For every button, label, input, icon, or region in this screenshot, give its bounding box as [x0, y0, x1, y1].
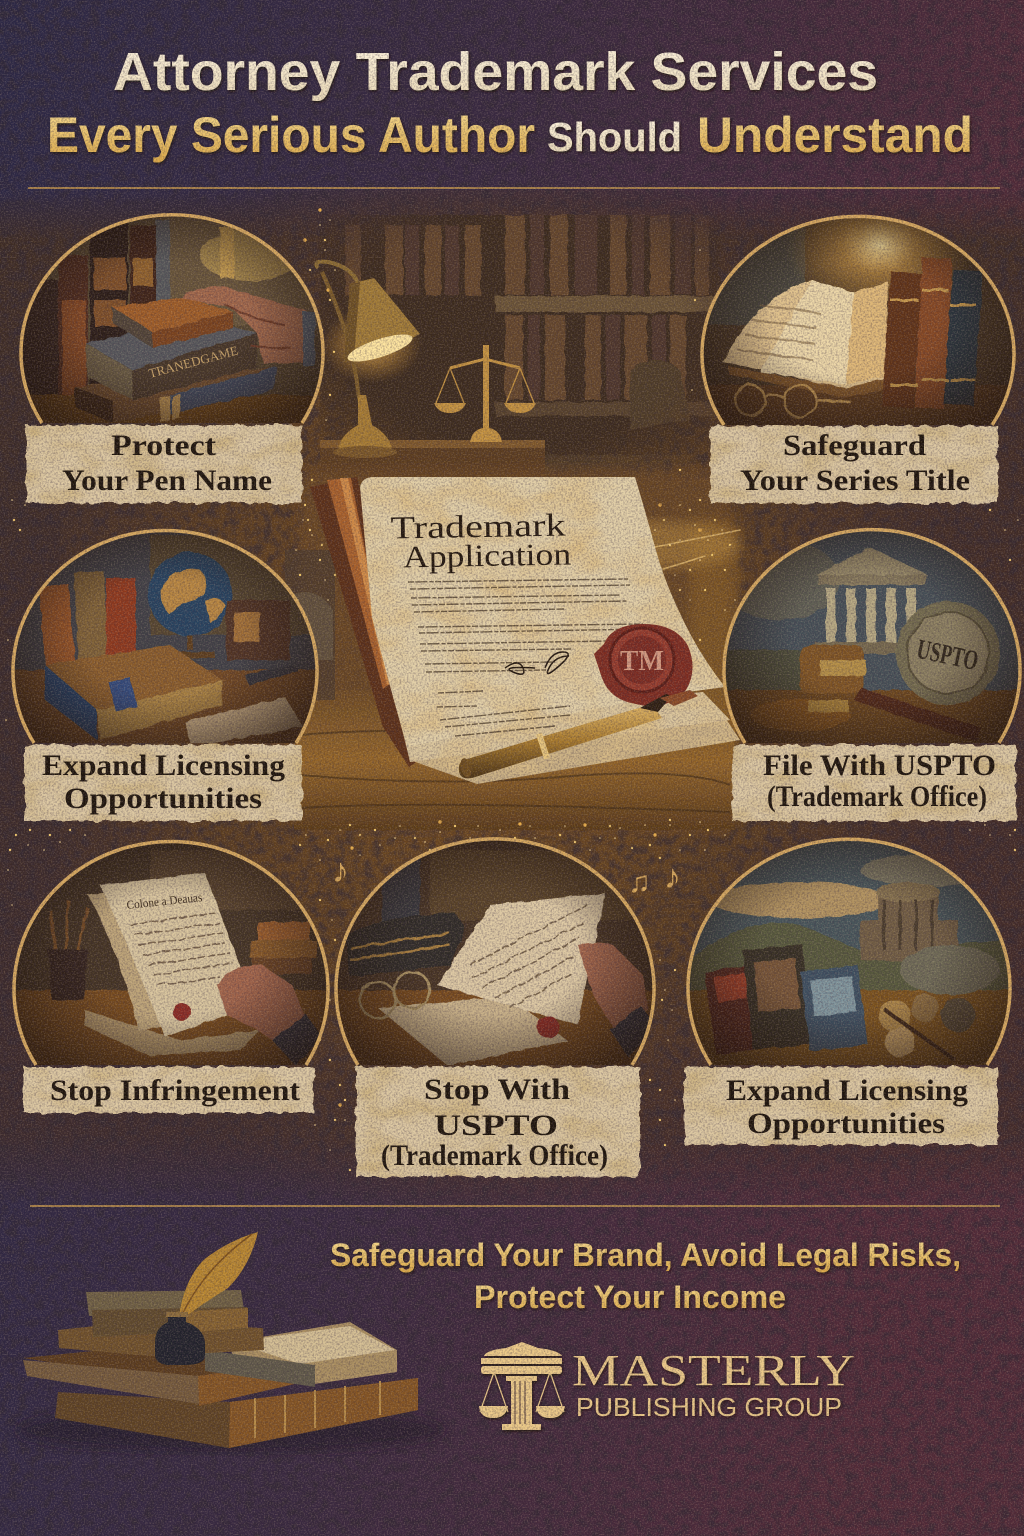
banner label: expand licensing opportunities second: [684, 1067, 998, 1145]
divider bottom: [30, 1205, 1000, 1207]
panel: file with USPTO: [720, 525, 1024, 821]
tagline: Protect Your Income: [474, 1279, 786, 1315]
wax seal TM: [594, 624, 693, 706]
icon: desk lamp: [316, 262, 422, 458]
title: Every Serious Author: [47, 107, 535, 163]
title: Understand: [697, 107, 973, 163]
title: Should: [547, 114, 682, 160]
document body lines: [408, 579, 644, 736]
banner label: file with USPTO: File With USPTO: [763, 749, 996, 782]
banner label: file with USPTO: (Trademark Office): [767, 780, 987, 813]
panel: stop infringement: [10, 838, 335, 1113]
banner label: file with USPTO: [732, 745, 1016, 821]
tagline: [330, 1237, 961, 1315]
banner label: expand licensing opportunities: [24, 745, 302, 821]
wooden desk: [283, 470, 740, 830]
banner label: expand licensing opportunities: Expand Licensing: [42, 749, 285, 782]
lower sheets: [410, 710, 740, 784]
title: Attorney Trademark Services: [113, 42, 878, 102]
panel: file with USPTO: USPTO: [914, 634, 981, 677]
panel: stop with USPTO: [330, 835, 660, 1177]
document stack: trademark application: [310, 477, 740, 784]
central library scene: [319, 214, 718, 475]
banner label: stop infringement: Stop Infringement: [50, 1074, 300, 1107]
banner label: stop with USPTO: USPTO: [434, 1109, 558, 1142]
panel: protect your pen name: [15, 210, 325, 503]
banner label: protect your pen name: Protect: [111, 429, 216, 462]
banner label: protect your pen name: [26, 425, 302, 503]
banner label: expand licensing opportunities second: Opportunities: [747, 1107, 945, 1140]
banner label: expand licensing opportunities second: Expand Licensing: [726, 1074, 968, 1107]
icon: music notes: ♪: [664, 859, 681, 896]
icon: music notes: ♫: [628, 866, 650, 899]
banner label: stop infringement: [24, 1067, 314, 1113]
icon: scales of justice: [434, 345, 536, 442]
banner label: stop with USPTO: Stop With: [424, 1073, 570, 1106]
banner label: safeguard your series title: Your Series Title: [740, 464, 970, 497]
icon: column and scales: [479, 1342, 565, 1430]
banner label: safeguard your series title: Safeguard: [783, 429, 926, 462]
document heading: [390, 506, 572, 575]
icon: music notes: ♪: [332, 853, 349, 890]
fountain pen: [459, 690, 698, 779]
footer book stack with quill and inkwell: [15, 1232, 445, 1452]
panel: expand licensing opportunities: [10, 525, 320, 821]
banner label: stop with USPTO: [356, 1067, 640, 1177]
logo: masterly publishing group: MASTERLY: [572, 1346, 855, 1395]
banner label: safeguard your series title: [710, 426, 998, 503]
wax seal TM: TM: [620, 646, 664, 677]
banner label: protect your pen name: Your Pen Name: [62, 464, 272, 497]
main sheet: [360, 477, 725, 747]
document heading: Application: [403, 536, 572, 574]
icon: music notes: [332, 853, 681, 899]
signature: [505, 652, 569, 674]
panel: safeguard your series title: [700, 214, 1016, 505]
book spine lettering: TRANEDGAME: [147, 343, 240, 381]
logo: masterly publishing group: [479, 1342, 855, 1430]
banner label: expand licensing opportunities: Opportunities: [64, 782, 262, 815]
book cover behind document: [310, 477, 423, 767]
divider top: [28, 187, 1000, 189]
title: [47, 42, 973, 163]
tagline: Safeguard Your Brand, Avoid Legal Risks,: [330, 1237, 961, 1273]
document heading: Trademark: [390, 507, 566, 546]
panel: stop infringement: Colone a Deauas: [126, 890, 203, 912]
panel: expand licensing opportunities second: [680, 835, 1020, 1145]
banner label: stop with USPTO: (Trademark Office): [381, 1139, 608, 1172]
logo: masterly publishing group: PUBLISHING GROUP: [576, 1392, 842, 1422]
sparkles: [6, 210, 1018, 1170]
